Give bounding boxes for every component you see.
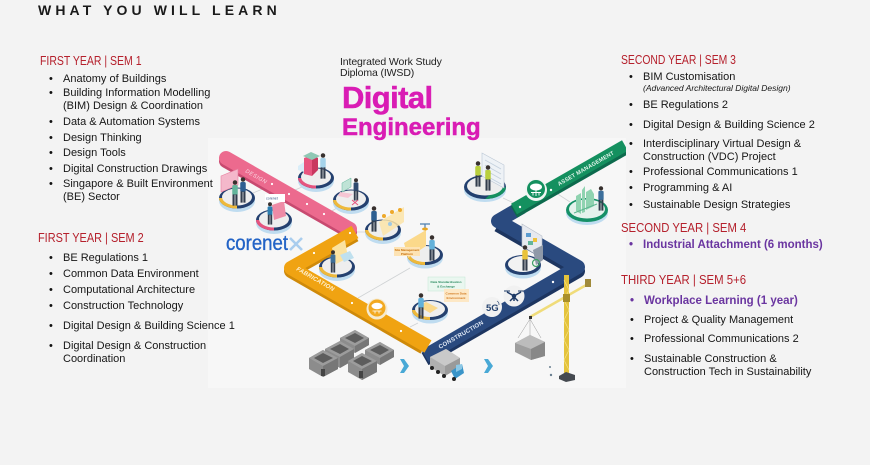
panel: first year sem 2 — [38, 231, 235, 365]
tower crane with load — [515, 275, 591, 382]
platform: building model — [298, 152, 334, 192]
platform: corenet drawing station: corenet — [266, 196, 278, 200]
title: WHAT YOU WILL LEARN — [38, 2, 281, 18]
module list: sem 1: Anatomy of Buildings — [63, 73, 166, 85]
platform: design team left — [219, 169, 255, 212]
module list: sem 5+6: Project & Quality Management — [644, 314, 793, 326]
module list: sem 1: Digital Construction Drawings — [63, 163, 207, 175]
platform: site management platform: Platform — [401, 252, 413, 256]
module list: sem 2: Digital Design & Construction — [63, 340, 206, 352]
platform: common data environment: Common Data — [446, 292, 467, 296]
module list: sem 3: BIM Customisation — [643, 71, 735, 83]
chevron arrow: fabrication to construction — [400, 359, 409, 373]
module list: sem 1: Building Information Modelling — [63, 87, 210, 99]
platform: site management platform — [394, 224, 443, 268]
module list: sem 1: Data & Automation Systems — [63, 116, 200, 128]
road: asset management — [514, 146, 625, 212]
module list: sem 2: Computational Architecture — [63, 284, 195, 296]
precast modules — [309, 330, 394, 380]
module list: sem 3: Professional Communications 1 — [643, 166, 798, 178]
module list: sem 5+6: Construction Tech in Sustainability — [644, 366, 811, 378]
module list: sem 5+6: Sustainable Construction & — [644, 353, 777, 365]
heading: first year sem 1: FIRST YEAR | SEM 1 — [40, 54, 142, 68]
module list: sem 3: Construction (VDC) Project — [643, 151, 776, 163]
module list: sem 5+6: Workplace Learning (1 year) — [644, 295, 798, 307]
icon: cloud asset — [525, 179, 547, 201]
icon: cloud fabrication — [366, 298, 388, 320]
connector lines — [253, 187, 570, 327]
module list: sem 1 — [49, 73, 213, 203]
platform: site management platform: Site Management — [395, 248, 419, 252]
road: fabrication — [291, 232, 428, 348]
diploma subtitle — [340, 56, 442, 78]
heading: Digital Engineering — [342, 80, 481, 141]
module list: sem 3: Digital Design & Building Science 2 — [643, 119, 815, 131]
icon: 5G — [482, 297, 502, 317]
road label: fabrication: FABRICATION — [295, 267, 335, 293]
panel: second year sem 4 — [621, 221, 823, 251]
module list: sem 2: BE Regulations 1 — [63, 252, 148, 264]
heading: Digital Engineering: Digital — [342, 80, 433, 115]
module list: sem 2: Digital Design & Building Science 1 — [63, 320, 235, 332]
central illustration: digital engineering pathway — [219, 140, 626, 382]
platform: common data environment — [412, 277, 469, 324]
road: design — [226, 158, 350, 232]
icon: 5G: 5G — [486, 303, 499, 314]
panel: third year sem 5+6 — [621, 273, 812, 378]
programme title block — [340, 56, 481, 141]
module list: sem 2: Construction Technology — [63, 300, 183, 312]
platform: design thinking desk — [333, 178, 369, 214]
module list: sem 3: Interdisciplinary Virtual Design & — [643, 138, 801, 150]
module list: sem 2: Common Data Environment — [63, 268, 199, 280]
module list: sem 3: (Advanced Architectural Digital Design) — [643, 83, 791, 93]
module list: sem 2: Coordination — [63, 353, 125, 365]
platform: fabrication desk — [319, 240, 355, 281]
diploma subtitle: Integrated Work Study — [340, 56, 442, 68]
heading: first year sem 2: FIRST YEAR | SEM 2 — [38, 231, 144, 245]
heading: Digital Engineering: Engineering — [342, 114, 481, 141]
diploma subtitle: Diploma (IWSD) — [340, 66, 414, 78]
platform: common data environment: Data Standardisation — [431, 280, 462, 284]
chevron arrow: transport to crane — [484, 359, 493, 373]
delivery truck — [430, 349, 464, 381]
module list: sem 3: Sustainable Design Strategies — [643, 199, 790, 211]
module list: sem 3: BE Regulations 2 — [643, 99, 728, 111]
heading: second year sem 4: SECOND YEAR | SEM 4 — [621, 221, 746, 235]
platform: asset inspection — [464, 153, 506, 202]
platform: corenet drawing station — [256, 194, 292, 234]
module list: sem 5+6: Professional Communications 2 — [644, 333, 799, 345]
logo: corenetX: corenet — [226, 232, 288, 255]
module list: sem 3: Programming & AI — [643, 182, 732, 194]
panel: first year sem 1 — [40, 54, 213, 203]
module: industrial attachment: Industrial Attachment (6 months) — [643, 239, 823, 251]
icon: drone — [504, 286, 524, 306]
platform: fabrication planning — [365, 206, 404, 244]
heading: third year sem 5+6: THIRD YEAR | SEM 5+6 — [621, 273, 746, 287]
road label: construction: CONSTRUCTION — [438, 320, 485, 351]
module list: sem 1: Singapore & Built Environment — [63, 178, 213, 190]
module list: sem 2 — [49, 252, 235, 365]
panel: second year sem 3 — [621, 53, 815, 211]
platform: green city model — [566, 186, 608, 225]
module list: sem 1: (BE) Sector — [63, 191, 120, 203]
platform: common data environment: & Exchange — [437, 284, 455, 288]
platform: common data environment: Environment — [447, 296, 465, 300]
heading: second year sem 3: SECOND YEAR | SEM 3 — [621, 53, 736, 67]
module list: sem 1: Design Thinking — [63, 132, 142, 144]
road label: design: DESIGN — [244, 169, 268, 186]
module list: sem 3 — [629, 71, 815, 211]
module list: sem 1: Design Tools — [63, 147, 126, 159]
road label: asset management: ASSET MANAGEMENT — [557, 150, 616, 188]
road: construction — [425, 207, 578, 359]
platform: construction review — [505, 224, 543, 278]
module list: sem 5+6 — [630, 295, 812, 378]
module list: sem 1: (BIM) Design & Coordination — [63, 100, 203, 112]
